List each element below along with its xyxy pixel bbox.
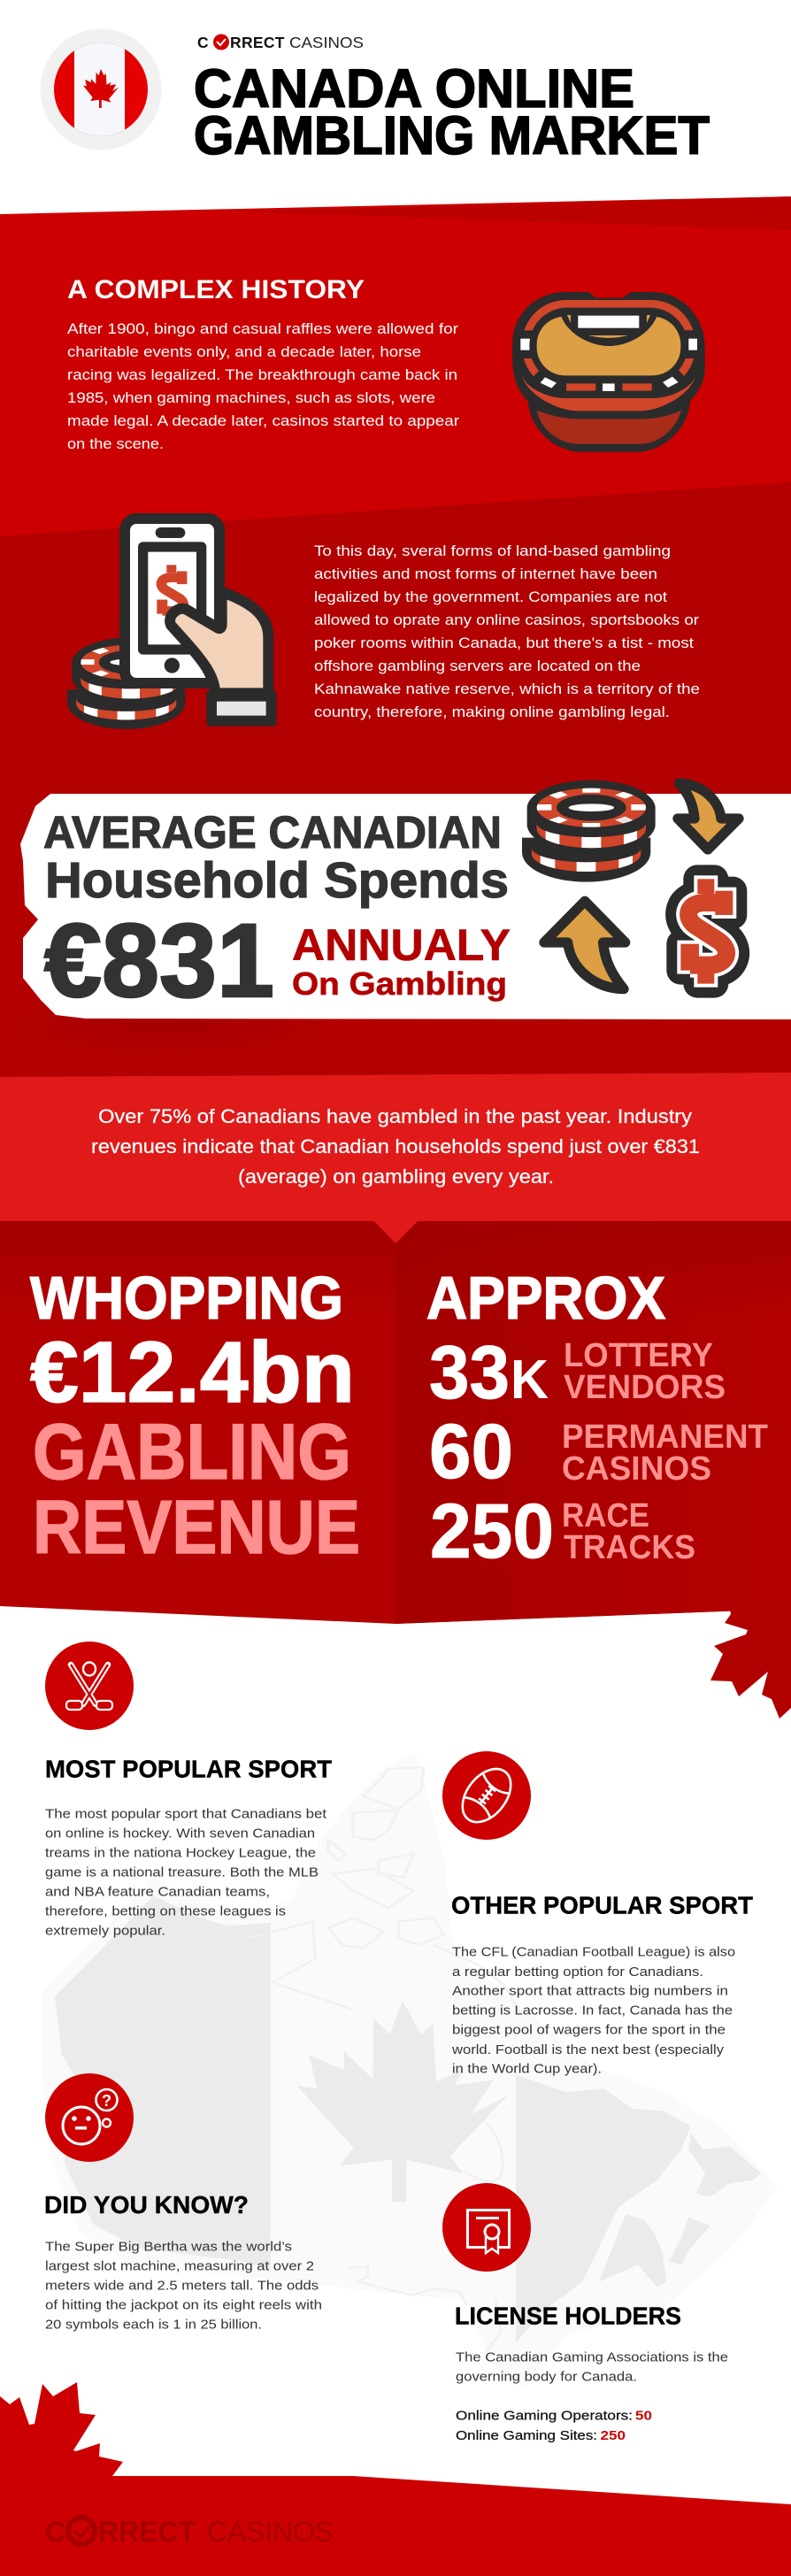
background map of Canada: [55, 1766, 761, 2353]
logo: footer Correct Casinos: CASINOS: [207, 2516, 334, 2548]
icon: Canadian flag badge: [41, 28, 161, 150]
panel: most popular sport: [45, 1642, 332, 1938]
text block: callout: (average) on gambling every year.: [238, 1165, 554, 1188]
panel: footer: [0, 2382, 791, 2576]
stat: 831 euro: €831: [44, 903, 274, 1019]
text block: super big bertha: The Super Big Bertha was the world’s: [45, 2240, 292, 2255]
heading: average canadian household spends: AVERAGE CANADIAN: [43, 807, 502, 857]
logo: footer Correct Casinos: RRECT: [98, 2516, 196, 2548]
text block: CFL: Another sport that attracts big numbers in: [452, 1984, 728, 1999]
stats: license counts: 250: [600, 2428, 626, 2443]
logo: Correct Casinos: [197, 34, 364, 51]
icon: money exchange arrows and dollar: [544, 783, 739, 989]
panel: approx counts: [426, 1265, 768, 1574]
stat: 60 permanent casinos: 60: [429, 1409, 513, 1495]
stat: 33k lottery vendors: VENDORS: [564, 1369, 726, 1406]
heading: most popular sport: MOST POPULAR SPORT: [45, 1756, 332, 1782]
icon: casino chips: [522, 780, 656, 882]
stats: license counts: Online Gaming Operators:: [456, 2409, 633, 2424]
stat: 60 permanent casinos: PERMANENT: [562, 1419, 768, 1456]
text block: CFL: betting is Lacrosse. In fact, Canada has the: [452, 2003, 733, 2018]
text block: CFL: world. Football is the next best (especially: [451, 2042, 725, 2057]
title: [194, 58, 710, 165]
text block: hockey: on online is hockey. With seven Canadian: [45, 1826, 315, 1842]
text block: callout: Over 75% of Canadians have gambled in the past year. Industry: [98, 1105, 692, 1127]
text block: legal status: poker rooms within Canada, but there's a tist - most: [314, 634, 694, 651]
stat: 33k lottery vendors: LOTTERY: [564, 1337, 713, 1374]
heading: other popular sport: OTHER POPULAR SPORT: [451, 1891, 753, 1919]
stats: license counts: 50: [635, 2409, 652, 2424]
panel: a complex history: [0, 196, 791, 549]
heading: approx: APPROX: [426, 1265, 665, 1332]
text block: super big bertha: of hitting the jackpot on its eight reels with: [45, 2297, 322, 2312]
text block: gaming associations: [456, 2349, 728, 2385]
text block: hockey: extremely popular.: [45, 1924, 165, 1938]
logo: Correct Casinos: O: [217, 34, 229, 51]
text block: CFL: biggest pool of wagers for the sport in the: [452, 2023, 726, 2038]
text block: history: on the scene.: [67, 435, 164, 452]
stat: 60 permanent casinos: [429, 1409, 768, 1495]
logo: Correct Casinos: RRECT: [230, 34, 285, 51]
logo: Correct Casinos: C: [197, 34, 209, 51]
stat: 250 race tracks: RACE: [562, 1497, 649, 1534]
heading: did you know: DID YOU KNOW?: [44, 2191, 249, 2218]
text block: hockey: treams in the nationa Hockey League, the: [45, 1846, 316, 1860]
icon: certificate: [442, 2183, 531, 2272]
stat label: annualy on gambling: [292, 920, 511, 1002]
stat: 250 race tracks: [430, 1488, 695, 1574]
text block: legal status: To this day, sveral forms of land-based gambling: [314, 542, 671, 559]
text block: history: After 1900, bingo and casual raffles were allowed for: [67, 320, 458, 337]
text block: super big bertha: 20 symbols each is 1 in 25 billion.: [45, 2318, 262, 2333]
stat label: annualy on gambling: ANNUALY: [292, 920, 511, 970]
text block: history: charitable events only, and a decade later, horse: [67, 343, 421, 360]
stat: whopping 12.4bn: €12.4bn: [30, 1324, 355, 1420]
stat: 250 race tracks: 250: [430, 1488, 554, 1574]
logo: Correct Casinos: CASINOS: [289, 34, 364, 51]
panel: license holders: [442, 2183, 728, 2443]
text block: hockey: The most popular sport that Canadians bet: [45, 1807, 327, 1821]
stat: whopping 12.4bn: [30, 1265, 355, 1420]
stat: 33k lottery vendors: 33: [429, 1331, 510, 1415]
panel: average household spend banner: [0, 780, 791, 1053]
heading: a complex history: A COMPLEX HISTORY: [67, 275, 365, 304]
logo: footer Correct Casinos: [45, 2516, 334, 2548]
icon: phone with chips and hand: [67, 519, 277, 729]
stat: 60 permanent casinos: CASINOS: [562, 1450, 711, 1488]
stat: whopping 12.4bn: WHOPPING: [30, 1265, 343, 1332]
text block: legal status: [314, 542, 700, 720]
text block: callout: revenues indicate that Canadian households spend just over €831: [91, 1135, 700, 1157]
panel: legal status: [0, 482, 791, 1079]
text block: CFL: a regular betting option for Canadians.: [452, 1965, 703, 1980]
stat label: gabling revenue: REVENUE: [33, 1486, 360, 1570]
text block: CFL: [451, 1945, 735, 2077]
panel: did you know: [44, 2073, 322, 2333]
stat: 33k lottery vendors: K: [511, 1350, 549, 1411]
text block: hockey: game is a national treasure. Both the MLB: [45, 1865, 319, 1880]
text block: CFL: The CFL (Canadian Football League) is also: [452, 1945, 735, 1960]
stat label: annualy on gambling: On Gambling: [292, 965, 507, 1002]
text block: super big bertha: largest slot machine, measuring at over 2: [45, 2259, 314, 2274]
decoration: maple leaf corner top right: [710, 1603, 791, 1719]
text block: hockey: [45, 1807, 327, 1938]
panel: stats background: [0, 1217, 791, 1624]
text block: history: made legal. A decade later, casinos started to appear: [67, 412, 459, 429]
title: GAMBLING MARKET: [194, 105, 710, 165]
text block: legal status: Kahnawake native reserve, which is a territory of the: [314, 681, 700, 697]
icon: thinking face: ?: [102, 2092, 111, 2110]
stats: license counts: [456, 2409, 652, 2443]
heading: license holders: LICENSE HOLDERS: [455, 2303, 681, 2330]
text block: callout: [91, 1105, 700, 1188]
text block: legal status: legalized by the government. Companies are not: [314, 588, 667, 605]
text block: history: 1985, when gaming machines, such as slots, were: [67, 389, 435, 406]
panel: other popular sport: [442, 1751, 753, 2077]
icon: poker table: [512, 292, 705, 452]
text block: legal status: offshore gambling servers are located on the: [314, 657, 641, 674]
text block: hockey: therefore, betting on these leagues is: [45, 1904, 286, 1919]
panel: revenue stat: [30, 1265, 360, 1570]
heading: average canadian household spends: [43, 807, 509, 909]
text block: legal status: activities and most forms of internet have been: [314, 565, 657, 582]
text block: legal status: allowed to oprate any online casinos, sportsbooks or: [314, 611, 699, 628]
icon: hockey sticks: [45, 1642, 134, 1730]
text block: gaming associations: The Canadian Gaming Associations is the: [456, 2349, 728, 2365]
title: CANADA ONLINE: [194, 58, 634, 119]
text block: history: [67, 320, 459, 452]
text block: history: racing was legalized. The breakthrough came back in: [67, 366, 457, 383]
text block: super big bertha: meters wide and 2.5 meters tall. The odds: [45, 2279, 319, 2294]
stats: license counts: Online Gaming Sites:: [456, 2428, 597, 2443]
text block: gaming associations: governing body for Canada.: [456, 2370, 637, 2385]
text block: legal status: country, therefore, making online gambling legal.: [314, 704, 670, 720]
icon: football: [442, 1751, 531, 1840]
stat label: gabling revenue: [33, 1407, 360, 1570]
heading: average canadian household spends: Household Spends: [45, 852, 509, 909]
panel: header: [41, 28, 710, 165]
stat: 250 race tracks: TRACKS: [564, 1529, 695, 1566]
logo: footer Correct Casinos: O: [70, 2516, 92, 2548]
stat: 33k lottery vendors: [429, 1331, 726, 1415]
panel: gambled past year callout: [0, 1073, 791, 1243]
text block: CFL: in the World Cup year).: [452, 2062, 602, 2077]
stat label: gabling revenue: GABLING: [33, 1407, 351, 1496]
logo: footer Correct Casinos: C: [45, 2516, 65, 2548]
text block: super big bertha: [45, 2240, 322, 2333]
text block: hockey: and NBA feature Canadian teams,: [45, 1885, 270, 1899]
icon: thinking face: [45, 2073, 134, 2162]
